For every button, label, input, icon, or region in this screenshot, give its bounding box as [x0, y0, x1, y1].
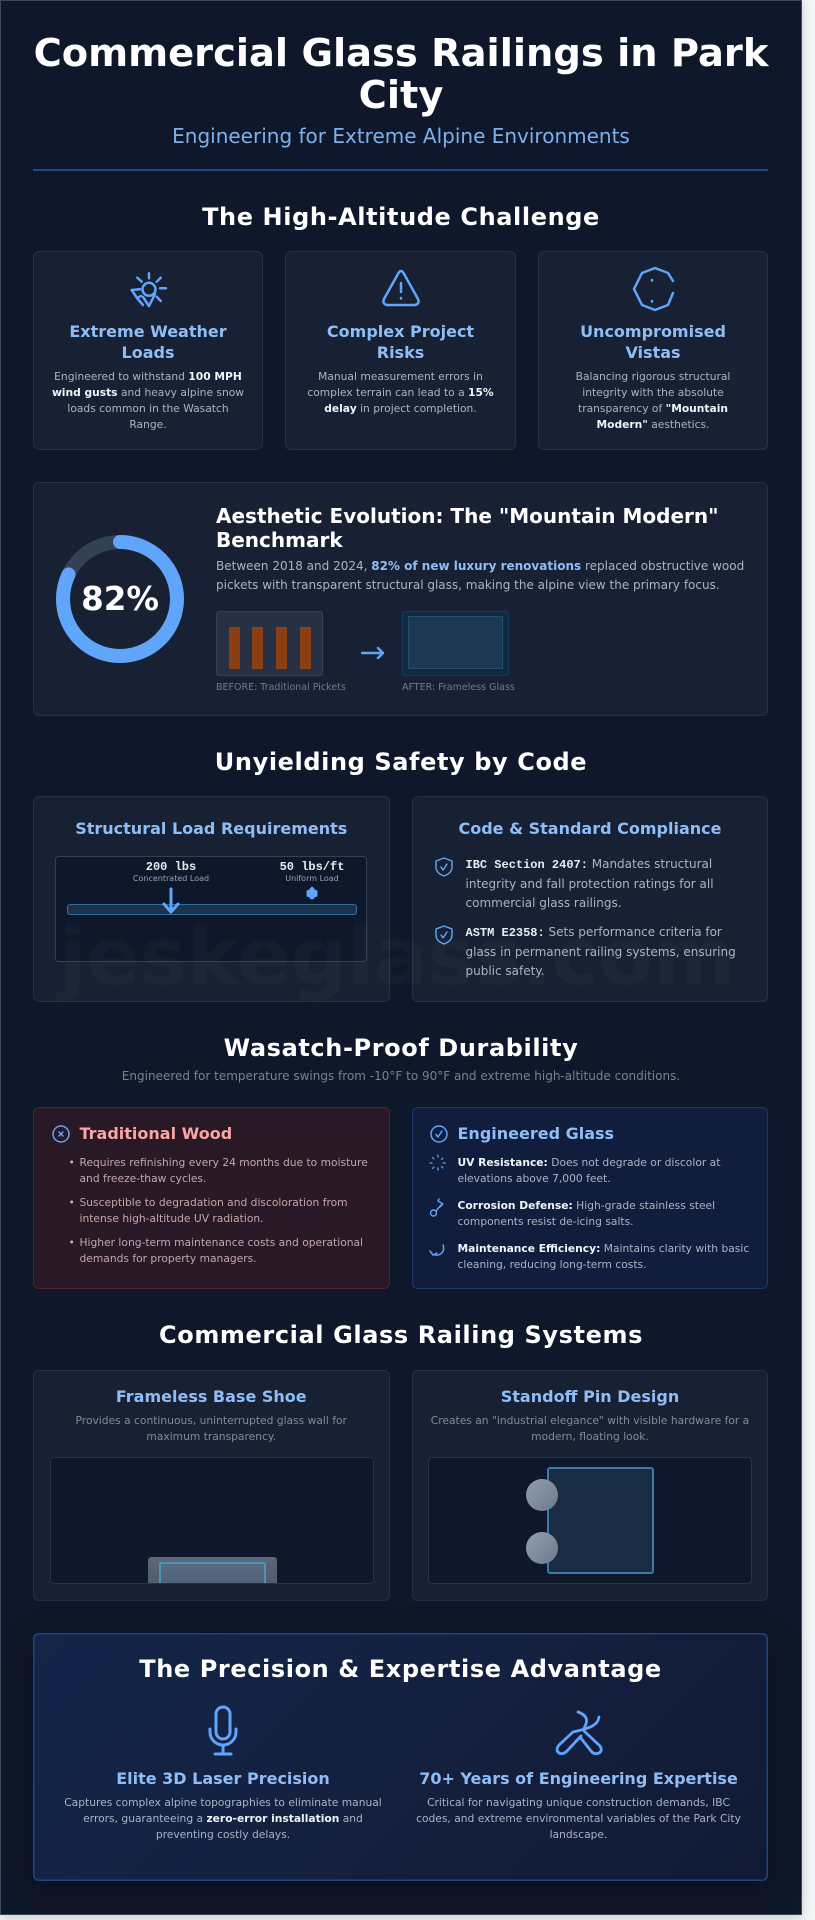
panel: aesthetic evolution [33, 482, 768, 716]
text: ASTM E2358: ASTM E2358: Sets performance criteria for [466, 925, 722, 940]
standoff pin [526, 1479, 558, 1511]
card text [307, 370, 494, 415]
card text: Range. [129, 418, 167, 431]
card title [327, 322, 474, 362]
bullet text [68, 1156, 368, 1185]
icon: shield check [435, 857, 453, 877]
card text: integrity with the absolute [582, 386, 724, 399]
panel text [216, 559, 744, 592]
bullet text: Higher long-term maintenance costs and operational [80, 1236, 363, 1249]
caption: after: AFTER: Frameless Glass [402, 682, 515, 693]
card title: Loads [122, 343, 174, 362]
panel text: Creates an "industrial elegance" with visible hardware for a [431, 1414, 749, 1427]
panel text: pickets with transparent structural glass, making the alpine view the primary focus. [216, 578, 720, 592]
card text: Manual measurement errors in [318, 370, 483, 383]
heading: wasatch-proof durability: Wasatch-Proof Durability [224, 1034, 578, 1062]
column title: 70+ Years of Engineering Expertise [419, 1769, 738, 1788]
panel text: modern, floating look. [531, 1430, 649, 1443]
panel: frameless base shoe [33, 1370, 390, 1601]
text: maintenance efficiency: Maintenance Efficiency: Maintains clarity with basic [458, 1242, 749, 1255]
text: corrosion defense: Corrosion Defense: High-grade stainless steel [458, 1199, 715, 1212]
diagram: base shoe [50, 1457, 374, 1584]
icon: octagon [632, 266, 674, 312]
column: laser precision [64, 1706, 382, 1841]
icon: shield check [435, 925, 453, 945]
card text [52, 370, 244, 431]
icon: uv rays [429, 1154, 446, 1171]
subtitle: Engineering for Extreme Alpine Environments [172, 124, 630, 148]
card title [580, 322, 726, 362]
caption: before: BEFORE: Traditional Pickets [216, 682, 346, 693]
column text: preventing costly delays. [156, 1828, 290, 1841]
glass panel [158, 1562, 266, 1592]
card text: delay in project completion. [324, 402, 477, 415]
panel text: Between 2018 and 2024, 82% of new luxury renovations replaced obstructive wood [216, 559, 744, 573]
panel: engineered glass [412, 1107, 768, 1289]
text: maintenance efficiency: cleaning, reducing long-term costs. [458, 1258, 646, 1271]
icon: sun and wind [130, 272, 168, 308]
icon: refresh arrow [429, 1244, 444, 1256]
column text: errors, guaranteeing a zero-error installation and [83, 1812, 363, 1825]
panel text [76, 1414, 347, 1443]
text: uv resistance [458, 1156, 720, 1185]
card text: loads common in the Wasatch [67, 402, 229, 415]
text: IBC section 2407: IBC Section 2407: Mandates structural [466, 857, 712, 872]
title: City [359, 73, 443, 118]
card text: complex terrain can lead to a 15% [307, 386, 494, 399]
column: engineering expertise [416, 1710, 741, 1841]
heading: the high-altitude challenge: The High-Altitude Challenge [202, 203, 600, 231]
text: ASTM E2358: public safety. [466, 964, 545, 978]
panel heading: Benchmark [216, 528, 343, 552]
label: uniform load: Uniform Load [285, 874, 339, 883]
heading: commercial glass railing systems: Commercial Glass Railing Systems [159, 1321, 643, 1349]
panel heading: Standoff Pin Design [501, 1387, 679, 1406]
column text: Critical for navigating unique construction demands, IBC [427, 1796, 730, 1809]
text: IBC section 2407: integrity and fall protection ratings for all [466, 877, 714, 891]
text: ASTM E2358 [466, 925, 736, 978]
panel: standoff pin design [412, 1370, 768, 1601]
text: IBC section 2407 [466, 857, 714, 910]
icon: corrosion defense [430, 1198, 444, 1217]
panel heading [216, 504, 719, 552]
gauge value: 82% [81, 580, 159, 618]
panel heading: Code & Standard Compliance [458, 819, 722, 838]
watermark: jeskeglass.com [59, 911, 735, 1003]
section subtitle: Engineered for temperature swings from -10°F to 90°F and extreme high-altitude conditions. [122, 1069, 680, 1083]
column text [416, 1796, 741, 1841]
heading: unyielding safety by code: Unyielding Safety by Code [215, 748, 587, 776]
header divider [33, 169, 768, 171]
wood drawbacks list: • [68, 1236, 75, 1249]
icon: warning triangle [382, 270, 420, 306]
bullet text [68, 1196, 348, 1225]
load diagram [55, 856, 367, 962]
title [34, 31, 770, 118]
column text: codes, and extreme environmental variables of the Park City [416, 1812, 741, 1825]
diagram: after frameless glass [402, 611, 509, 676]
title: Commercial Glass Railings in Park [34, 31, 768, 76]
diagram: before pickets [216, 611, 323, 676]
chart: 82 percent gauge [56, 535, 184, 663]
card title: Uncompromised [580, 322, 726, 341]
panel text: Provides a continuous, uninterrupted glass wall for [76, 1414, 347, 1427]
panel: code and standard compliance [412, 796, 768, 1002]
text: IBC section 2407: commercial glass railings. [466, 896, 622, 910]
bullet text: and freeze-thaw cycles. [80, 1172, 206, 1185]
panel heading: Aesthetic Evolution: The "Mountain Modern" [216, 504, 719, 528]
card: uncompromised vistas [538, 251, 768, 450]
text: uv resistance: elevations above 7,000 feet. [458, 1172, 611, 1185]
panel: structural load requirements [33, 796, 390, 1002]
card title: Risks [377, 343, 424, 362]
column title: Elite 3D Laser Precision [116, 1769, 330, 1788]
card: complex project risks [285, 251, 516, 450]
arrow: before to after [360, 646, 384, 660]
column text [64, 1796, 382, 1841]
glass bar [66, 904, 356, 915]
panel heading: Structural Load Requirements [75, 819, 347, 838]
text: corrosion defense [458, 1199, 715, 1228]
column text: Captures complex alpine topographies to eliminate manual [64, 1796, 382, 1809]
label: 200 lbs: 200 lbs [146, 860, 196, 874]
text: uv resistance: UV Resistance: Does not degrade or discolor at [458, 1156, 720, 1169]
heading: The Precision & Expertise Advantage [139, 1655, 662, 1683]
panel heading: Traditional Wood [80, 1124, 232, 1143]
label: concentrated load: Concentrated Load [133, 874, 209, 883]
card title: Extreme Weather [69, 322, 227, 341]
card title [69, 322, 227, 362]
panel: traditional wood [33, 1107, 390, 1289]
card text [576, 370, 730, 431]
panel text: maximum transparency. [146, 1430, 276, 1443]
standoff pin [526, 1532, 558, 1564]
wood drawbacks list: • [68, 1196, 75, 1209]
bullet text: demands for property managers. [80, 1252, 257, 1265]
label: 50 lbs/ft: 50 lbs/ft [280, 860, 344, 874]
panel text [431, 1414, 749, 1443]
diagram: standoff pins [428, 1457, 752, 1584]
card text: Engineered to withstand 100 MPH [54, 370, 242, 383]
card text: wind gusts and heavy alpine snow [52, 386, 244, 399]
panel heading: Engineered Glass [458, 1124, 614, 1143]
text: maintenance efficiency [458, 1242, 749, 1271]
icon: crossed tools [556, 1710, 603, 1756]
base shoe channel [148, 1557, 276, 1584]
text: ASTM E2358: glass in permanent railing systems, ensuring [466, 945, 736, 959]
wood drawbacks list [68, 1156, 368, 1265]
bullet text: Susceptible to degradation and discoloration from [80, 1196, 348, 1209]
arrow: concentrated load [162, 888, 180, 914]
bullet text: Requires refinishing every 24 months due to moisture [80, 1156, 368, 1169]
panel: precision and expertise advantage [33, 1633, 768, 1881]
icon: x circle [52, 1125, 70, 1143]
column text: landscape. [550, 1828, 607, 1841]
card text: transparency of "Mountain [578, 402, 728, 415]
card text: Balancing rigorous structural [576, 370, 730, 383]
card: extreme weather loads [33, 251, 263, 450]
card title: Complex Project [327, 322, 474, 341]
panel heading: Frameless Base Shoe [116, 1387, 307, 1406]
bullet text: intense high-altitude UV radiation. [80, 1212, 264, 1225]
wood drawbacks list: • [68, 1156, 75, 1169]
icon: check circle [430, 1125, 448, 1143]
text: corrosion defense: components resist de-icing salts. [458, 1215, 634, 1228]
glass panel [547, 1467, 654, 1574]
bullet text [68, 1236, 363, 1265]
card title: Vistas [625, 343, 681, 362]
card text: Modern" aesthetics. [597, 418, 709, 431]
icon: uniform load [306, 886, 318, 900]
icon: microphone [208, 1706, 238, 1756]
